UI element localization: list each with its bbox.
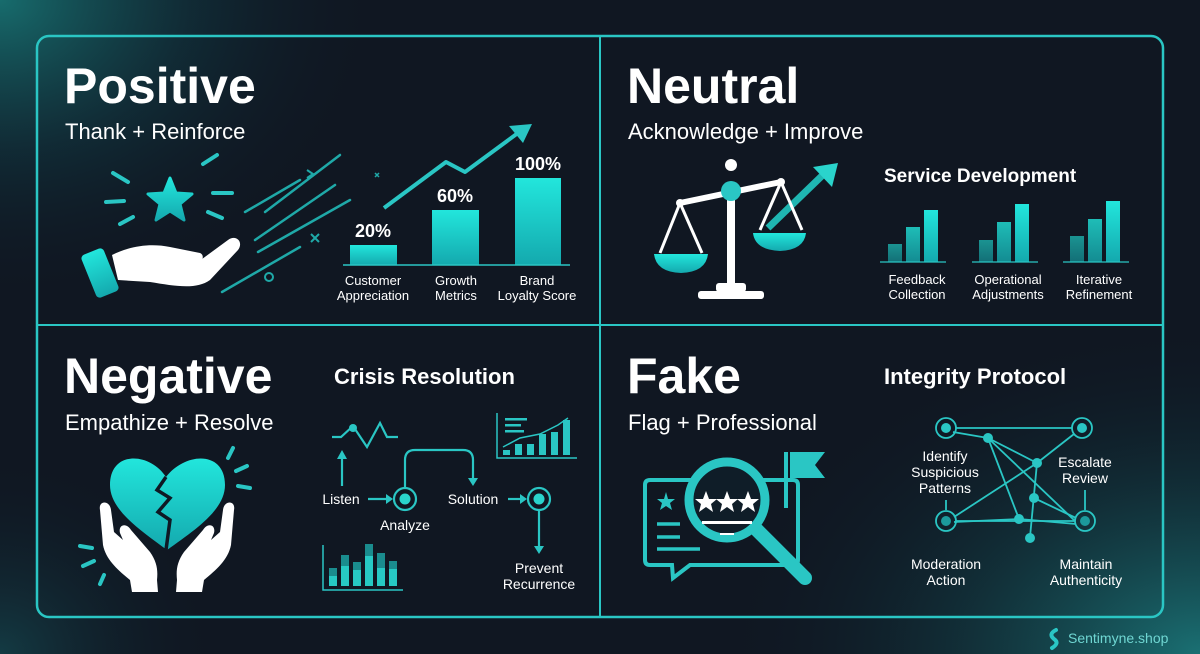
diagram: integrity network: Action	[927, 572, 965, 588]
panel: neutral	[627, 58, 1133, 302]
diagram: integrity network: Suspicious	[911, 464, 979, 480]
diagram: crisis resolution flow: Prevent	[515, 560, 563, 576]
heading: Integrity Protocol: Integrity Protocol	[884, 364, 1066, 389]
bar chart: service development: Feedback	[888, 272, 946, 287]
panel: fake	[627, 348, 1122, 588]
bar chart: positive metrics: 20%	[355, 221, 391, 241]
subheading: Flag + Professional: Flag + Professional	[628, 410, 817, 435]
bar chart: positive metrics: Metrics	[435, 288, 477, 303]
heading: Negative: Negative	[64, 348, 272, 404]
bar chart: positive metrics: Customer	[345, 273, 402, 288]
icon: balance scale with arrow	[654, 159, 838, 299]
heading: Positive: Positive	[64, 58, 256, 114]
icon: broken heart in hands	[80, 448, 250, 592]
bar chart: positive metrics: Brand	[520, 273, 554, 288]
bar chart: positive metrics	[337, 124, 576, 303]
bar chart: positive metrics: Growth	[435, 273, 477, 288]
bar chart: service development	[880, 201, 1133, 302]
subheading: Empathize + Resolve: Empathize + Resolve	[65, 410, 274, 435]
diagram: integrity network: Review	[1062, 470, 1109, 486]
heading: Fake: Fake	[627, 348, 741, 404]
diagram: integrity network: Maintain	[1060, 556, 1112, 572]
icon: hand with star	[80, 155, 350, 299]
bar chart: positive metrics: 100%	[515, 154, 561, 174]
diagram: integrity network: Identify	[922, 448, 968, 464]
bar chart: positive metrics: Appreciation	[337, 288, 409, 303]
heading: Service Development: Service Development	[884, 166, 1077, 187]
subheading: Thank + Reinforce: Thank + Reinforce	[65, 119, 245, 144]
diagram: crisis resolution flow: Recurrence	[503, 576, 575, 592]
diagram: crisis resolution flow	[322, 413, 577, 592]
diagram: crisis resolution flow: Solution	[448, 491, 498, 507]
panel: negative	[64, 348, 577, 592]
bar chart: positive metrics: Loyalty Score	[498, 288, 576, 303]
bar chart: service development: Adjustments	[972, 287, 1044, 302]
diagram: integrity network: Moderation	[911, 556, 981, 572]
diagram: crisis resolution flow: Analyze	[380, 517, 430, 533]
diagram: integrity network: Authenticity	[1050, 572, 1122, 588]
bar chart: service development: Operational	[974, 272, 1042, 287]
bar chart: service development: Iterative	[1076, 272, 1122, 287]
subheading: Acknowledge + Improve: Acknowledge + Improve	[628, 119, 863, 144]
footer: brand: Sentimyne.shop	[1068, 630, 1169, 646]
heading: Crisis Resolution: Crisis Resolution	[334, 364, 515, 389]
diagram: crisis resolution flow: Listen	[322, 491, 360, 507]
diagram: integrity network	[911, 418, 1122, 588]
diagram: integrity network: Patterns	[919, 480, 971, 496]
bar chart: service development: Collection	[888, 287, 946, 302]
bar chart: service development: Refinement	[1066, 287, 1133, 302]
bar chart: positive metrics: 60%	[437, 186, 473, 206]
heading: Neutral: Neutral	[627, 58, 799, 114]
diagram: integrity network: Escalate	[1058, 454, 1112, 470]
icon: magnifier over review	[645, 452, 825, 578]
panel: positive	[64, 58, 576, 303]
